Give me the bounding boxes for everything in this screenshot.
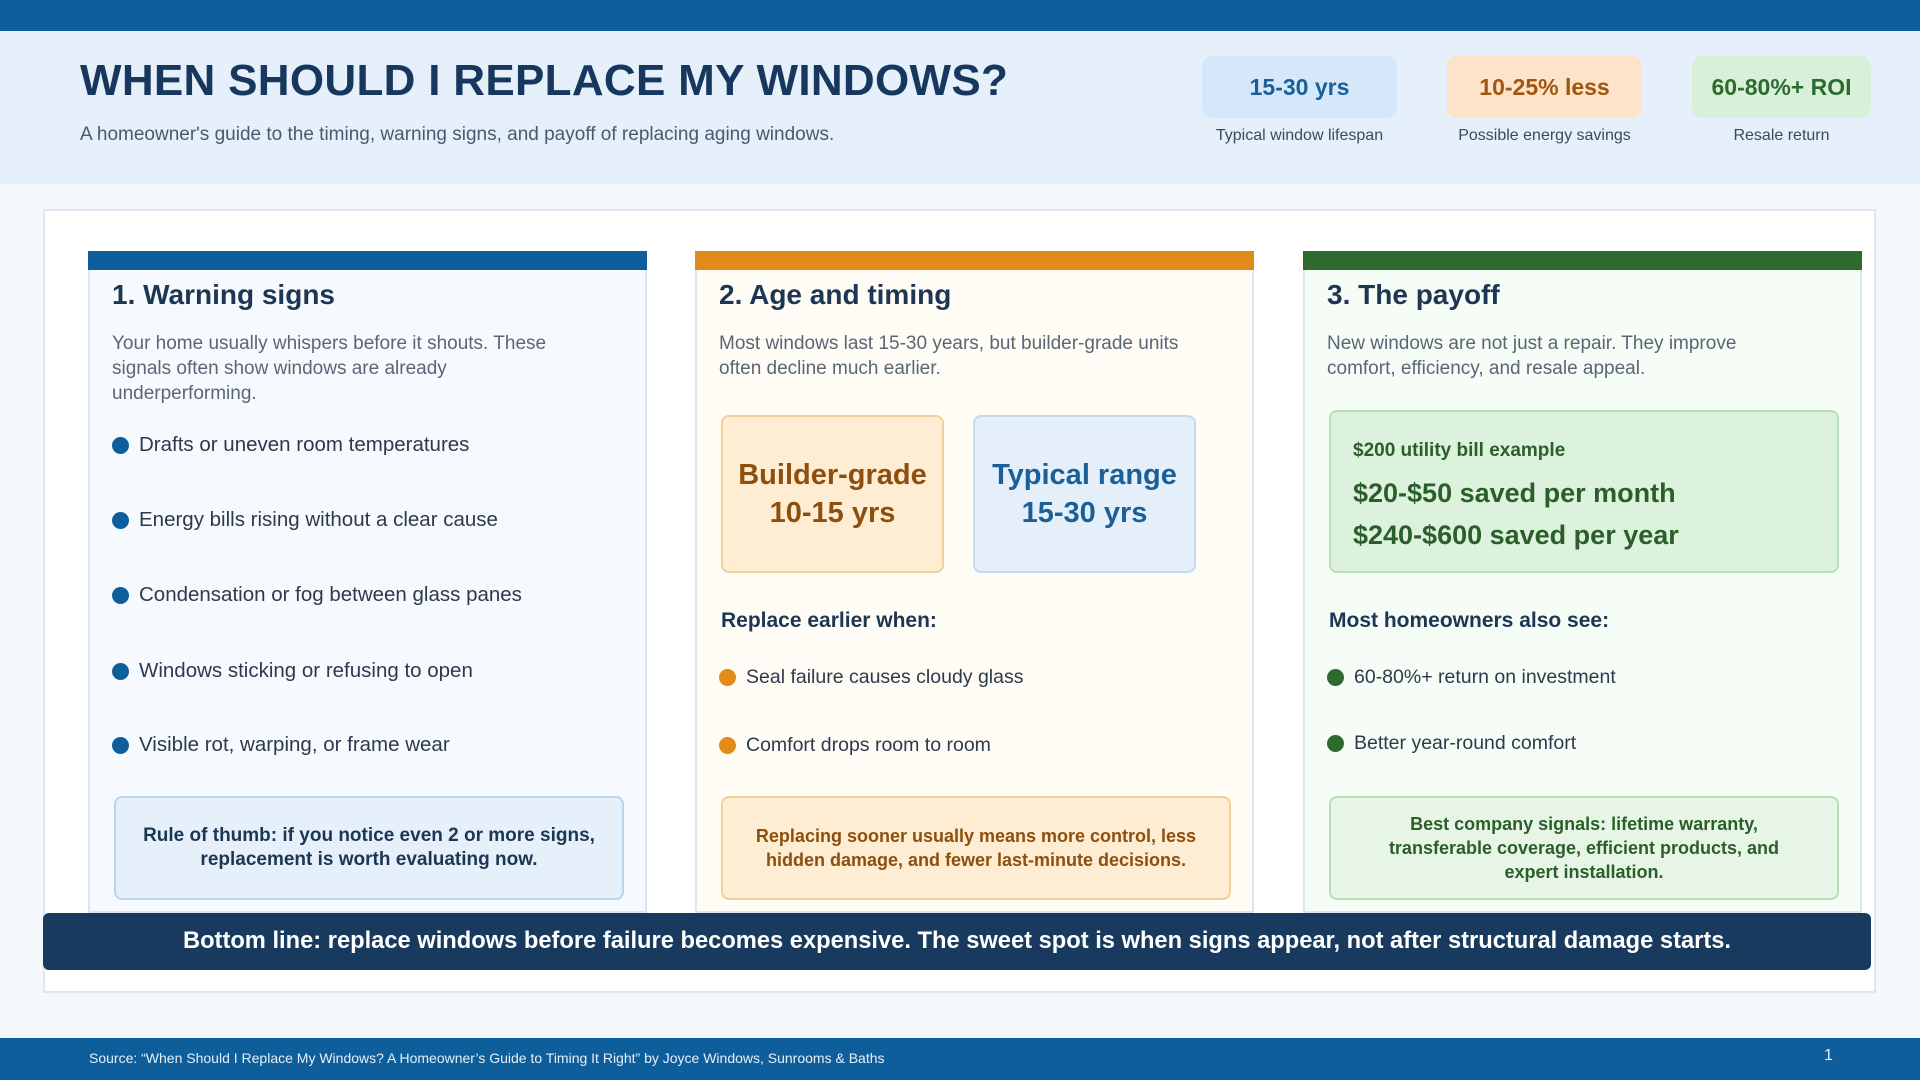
header band (0, 31, 1920, 184)
stat: ROI (1692, 56, 1871, 144)
top bar (0, 0, 1920, 31)
stat: ROI: 60-80%+ ROI (1712, 74, 1852, 100)
box: builder-grade: 10-15 yrs (770, 497, 895, 529)
bullet list: Energy bills rising without a clear cause (139, 508, 498, 531)
title: WHEN SHOULD I REPLACE MY WINDOWS? (80, 56, 1008, 105)
subheading: Most homeowners also see: (1329, 609, 1609, 632)
bullet list (1327, 666, 1616, 754)
stat: energy savings: Possible energy savings (1458, 127, 1631, 144)
heading: 1. Warning signs (112, 279, 335, 310)
callout: Replacing sooner usually means more control, less hidden damage, and fewer last-minute decisions. (756, 826, 1196, 870)
callout: Best company signals: lifetime warranty, transferable coverage, efficient products, and expert installation. (1389, 814, 1779, 882)
savings box: $240-$600 saved per year (1353, 520, 1679, 550)
panel: payoff (1303, 251, 1862, 913)
bullet list: Better year-round comfort (1354, 732, 1576, 754)
box: typical range: Typical range (992, 459, 1177, 491)
description: Your home usually whispers before it shouts. These signals often show windows are already underperforming. (112, 333, 546, 404)
box: typical range (973, 415, 1196, 573)
callout: rule of thumb (114, 796, 624, 900)
heading: 3. The payoff (1327, 279, 1500, 310)
callout (1329, 796, 1839, 900)
box: builder-grade (721, 415, 944, 573)
callout (721, 796, 1231, 900)
stat: lifespan: 15-30 yrs (1250, 74, 1349, 100)
description: Most windows last 15-30 years, but builder-grade units often decline much earlier. (719, 333, 1178, 379)
savings box (1329, 410, 1839, 573)
bullet list: Visible rot, warping, or frame wear (139, 733, 450, 756)
bullet list (719, 666, 1024, 756)
box: typical range: 15-30 yrs (1022, 497, 1147, 529)
savings box: $20-$50 saved per month (1353, 478, 1676, 508)
footer bar (0, 1038, 1920, 1080)
subheading: Replace earlier when: (721, 609, 937, 632)
page number: 1 (1824, 1047, 1833, 1064)
bullet list: Windows sticking or refusing to open (139, 659, 473, 682)
heading: 2. Age and timing (719, 279, 951, 310)
savings box: $200 utility bill example (1353, 440, 1565, 461)
bullet list: Seal failure causes cloudy glass (746, 666, 1024, 688)
subtitle: A homeowner's guide to the timing, warning signs, and payoff of replacing aging windows. (80, 124, 834, 145)
main panel (43, 209, 1876, 993)
stat: energy savings (1447, 56, 1642, 144)
box: builder-grade: Builder-grade (738, 459, 927, 491)
description: New windows are not just a repair. They improve comfort, efficiency, and resale appeal. (1327, 333, 1736, 379)
panel: age and timing (695, 251, 1254, 913)
bullet list: Comfort drops room to room (746, 734, 991, 756)
callout: rule of thumb: Rule of thumb: if you notice even 2 or more signs, replacement is worth evaluating now. (143, 825, 595, 870)
bottom line banner: Bottom line: replace windows before failure becomes expensive. The sweet spot is when signs appear, not after structural damage starts. (183, 928, 1731, 954)
stat: lifespan (1202, 56, 1397, 144)
bullet list: 60-80%+ return on investment (1354, 666, 1616, 688)
stat: ROI: Resale return (1733, 127, 1830, 144)
bottom line banner (43, 913, 1871, 970)
stat: lifespan: Typical window lifespan (1216, 127, 1383, 144)
bullet list: Condensation or fog between glass panes (139, 583, 522, 606)
panel: warning signs (88, 251, 647, 913)
source text: Source: “When Should I Replace My Windows? A Homeowner’s Guide to Timing It Right” by Joyce Windows, Sunrooms & Baths (89, 1050, 884, 1066)
bullet list: Drafts or uneven room temperatures (139, 433, 469, 456)
bullet list (112, 433, 522, 756)
stat: energy savings: 10-25% less (1479, 74, 1610, 100)
